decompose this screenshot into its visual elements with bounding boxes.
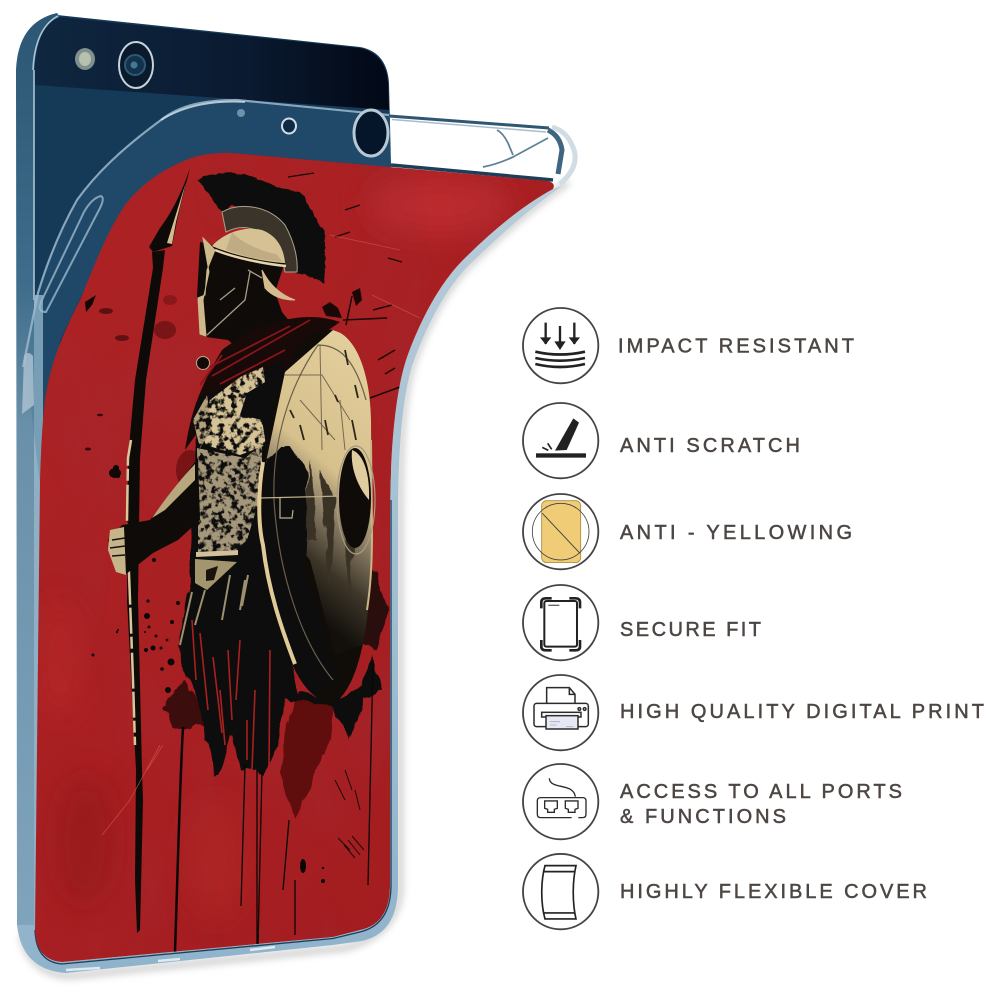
feature list (523, 308, 984, 929)
artwork: spatter behind warrior (85, 173, 420, 490)
artwork: drips and lower mass (102, 655, 380, 952)
feature: anti scratch (523, 403, 800, 478)
warrior: helmet crest band (222, 206, 297, 272)
artwork: red ground (30, 150, 570, 970)
phone: side frame (16, 13, 60, 930)
icon: yellow phone crossed (523, 494, 598, 569)
spear: shaft (127, 250, 165, 933)
phone: frame highlight line (33, 16, 58, 300)
artwork: spear (127, 168, 190, 933)
label: highly flexible cover: HIGHLY FLEXIBLE COVER (620, 881, 927, 903)
case: left side capsule (22, 353, 34, 414)
label: high quality digital print: HIGH QUALITY DIGITAL PRINT (620, 701, 984, 723)
warrior: helmet dome (212, 229, 285, 263)
case: camera cut-out ring (354, 110, 388, 156)
artwork: warrior figure (108, 173, 340, 775)
warrior: red streaks in skirt (192, 620, 270, 770)
case: small microphone hole (282, 118, 296, 134)
case: top right bar and tip (389, 116, 575, 184)
icon: camera lens (119, 42, 153, 88)
warrior: cheek guard edge (198, 238, 215, 336)
label: secure fit: SECURE FIT (620, 619, 761, 641)
shield: cream rim (259, 462, 295, 664)
icon: impact arrows (523, 308, 598, 383)
label: access to all ports and functions: & FUNCTIONS (620, 806, 786, 828)
warrior: torso and skirt (178, 360, 300, 775)
shield: right rim (367, 440, 372, 610)
warrior: cape (185, 317, 340, 450)
warrior: hand (108, 527, 126, 575)
case: dark edge above print (391, 165, 553, 180)
feature: anti yellowing (523, 494, 852, 569)
label: anti scratch: ANTI SCRATCH (620, 435, 800, 457)
warrior: neck guard (262, 270, 295, 300)
warrior: skirt straps (180, 575, 248, 645)
icon: flash (75, 48, 95, 70)
shield: dark brush strokes (266, 446, 312, 694)
label: impact resistant: IMPACT RESISTANT (618, 336, 854, 358)
warrior: waist flap (195, 559, 237, 590)
shield: handle bar (260, 496, 342, 518)
artwork: ink spatter dots (92, 465, 180, 693)
label: access to all ports and functions (620, 781, 902, 828)
case: side button pill (40, 196, 103, 312)
warrior: chest highlights (193, 367, 266, 552)
feature: high quality digital print (523, 675, 984, 750)
phone: lower frame bar (34, 295, 43, 935)
icon: ports with cable (523, 764, 598, 839)
case: rim inner line (35, 500, 391, 964)
case: transparent top corner overlay (22, 100, 391, 500)
phone: back of handset (16, 13, 391, 935)
warrior: plume (198, 173, 326, 284)
printed artwork (30, 150, 570, 970)
artwork: dark red splash (165, 570, 388, 817)
warrior: belt (196, 550, 238, 557)
case: curved rim (17, 186, 562, 973)
artwork: round shield (259, 330, 375, 703)
icon: flexed cover (523, 854, 598, 929)
phone: dark glass band (35, 17, 389, 110)
shield: central boss (337, 446, 375, 554)
label: access to all ports and functions: ACCESS TO ALL PORTS (620, 781, 902, 803)
icon: printer (523, 675, 598, 750)
artwork: paint texture (398, 348, 410, 394)
warrior: arm (108, 458, 200, 575)
feature: highly flexible cover (523, 854, 927, 929)
shadow under case (22, 182, 568, 976)
shield: inner ring line (274, 345, 366, 680)
warrior: head and neck (197, 242, 288, 343)
feature: secure fit (523, 585, 761, 660)
feature: impact resistant (523, 308, 854, 383)
shield: cream face (266, 330, 375, 655)
case: faint speaker dot (237, 109, 245, 117)
case: bottom button marks (66, 947, 275, 970)
spear: head (149, 168, 190, 252)
artwork: paint blotches (38, 175, 510, 920)
feature: access to all ports (523, 764, 902, 839)
icon: phone with corner grips (523, 585, 598, 660)
case: inner tip lines (483, 130, 548, 167)
case: top arc edge (23, 100, 389, 367)
icon: blade scratching surface (523, 403, 598, 478)
label: anti yellowing: ANTI - YELLOWING (620, 522, 852, 544)
shield: wear specks (290, 350, 358, 440)
case: highlight on corner (161, 102, 245, 120)
spear: cream edge (127, 440, 135, 745)
case: tip thick shading (548, 130, 562, 174)
